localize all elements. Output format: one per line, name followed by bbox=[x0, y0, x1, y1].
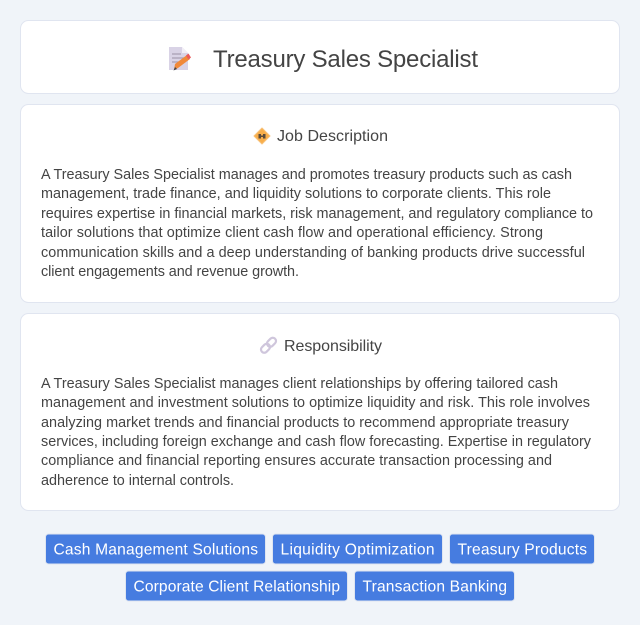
text: job description paragraph: communication skills and a deep understanding of banking products drive successful bbox=[41, 245, 585, 261]
tag: cash management solutions bbox=[46, 534, 266, 564]
heading: title: Treasury Sales Specialist bbox=[213, 46, 478, 73]
text: job description paragraph: requires expertise in financial markets, risk management, and regulatory compliance to bbox=[41, 206, 593, 222]
text: responsibility paragraph: adherence to internal controls. bbox=[41, 473, 234, 489]
icon: document with pencil bbox=[169, 47, 191, 70]
heading: responsibility: Responsibility bbox=[284, 338, 382, 355]
text: responsibility paragraph: management and investment solutions to optimize liquidity and risk. This role involves bbox=[41, 395, 590, 411]
panel: job description bbox=[20, 104, 620, 302]
text: job description paragraph: tailor solutions that optimize client cash flow and operational efficiency. Strong bbox=[41, 225, 543, 241]
text: responsibility paragraph: analyzing market trends and financial products to recommend appropriate treasury bbox=[41, 415, 570, 431]
text: job description paragraph: A Treasury Sales Specialist manages and promotes treasury products such as cash bbox=[41, 167, 572, 183]
tag: corporate client relationship bbox=[126, 571, 348, 601]
heading: job description: Job Description bbox=[277, 128, 388, 145]
panel: responsibility bbox=[20, 314, 620, 510]
panel: title bbox=[20, 20, 620, 94]
tag: transaction banking bbox=[354, 571, 514, 601]
tag: transaction banking: Transaction Banking bbox=[362, 578, 507, 596]
tag: liquidity optimization: Liquidity Optimization bbox=[280, 542, 434, 558]
text: responsibility paragraph: A Treasury Sales Specialist manages client relationships by offering tailored cash bbox=[41, 376, 558, 392]
tag: treasury products bbox=[450, 534, 594, 564]
tag: cash management solutions: Cash Management Solutions bbox=[54, 542, 258, 558]
tags bbox=[46, 534, 594, 601]
text: responsibility paragraph: compliance and financial reporting ensures accurate transaction processing and bbox=[41, 453, 552, 469]
icon: orange diamond bbox=[254, 128, 270, 144]
tag: liquidity optimization bbox=[272, 534, 442, 564]
icon: chain link bbox=[260, 336, 277, 354]
text: responsibility paragraph bbox=[41, 376, 592, 489]
tag: corporate client relationship: Corporate Client Relationship bbox=[134, 578, 340, 596]
text: job description paragraph: management, trade finance, and liquidity solutions to corporate clients. This role bbox=[41, 186, 551, 202]
text: job description paragraph: client engagements and revenue growth. bbox=[41, 264, 299, 280]
text: responsibility paragraph: services, including foreign exchange and cash flow forecasting. Expertise in regulatory bbox=[41, 434, 592, 450]
text: job description paragraph bbox=[41, 167, 593, 280]
tag: treasury products: Treasury Products bbox=[458, 542, 587, 558]
